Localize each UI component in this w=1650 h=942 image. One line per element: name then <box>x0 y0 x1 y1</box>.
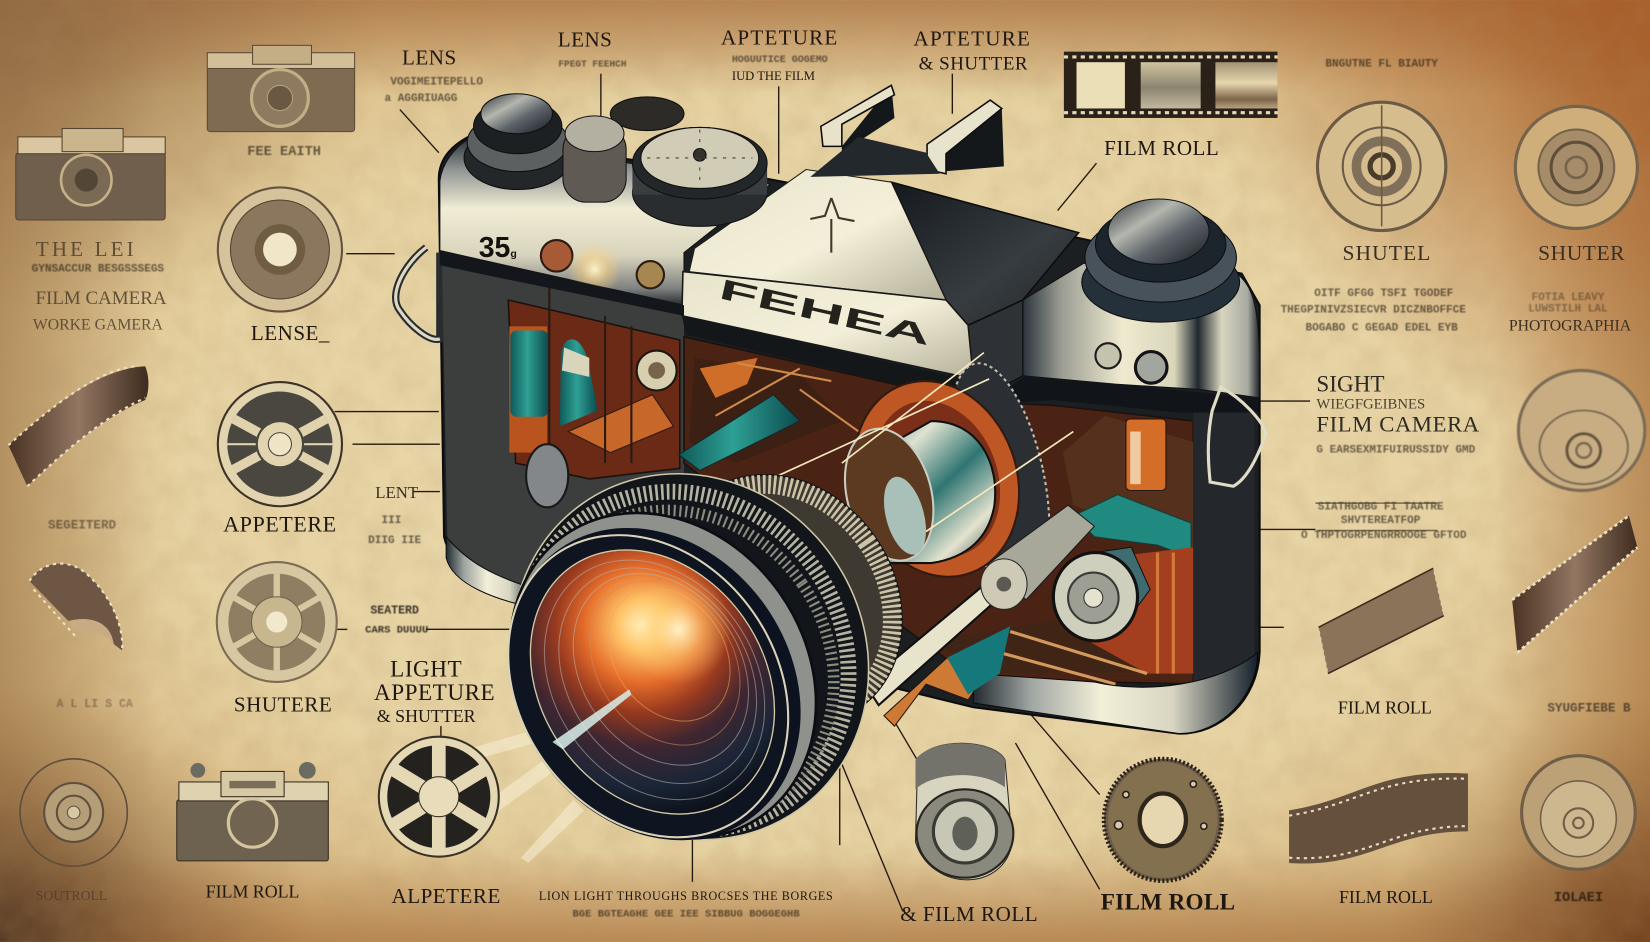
icon: film strip, top <box>1064 52 1277 118</box>
disc: shuter diagram <box>1515 106 1637 228</box>
heading: aperture: HOGUUTICE GOGEMO <box>732 54 828 65</box>
bottom caption: BGE BGTEAGHE GEE IEE SIBBUG BOGGEGHB <box>573 909 800 921</box>
small knob back <box>610 97 684 131</box>
centre knob <box>563 116 626 202</box>
lens: knurled rings <box>453 427 915 895</box>
black band under right plate <box>980 376 1259 413</box>
label: film roll, bold: FILM ROLL <box>1101 889 1235 915</box>
left leatherette <box>442 263 684 589</box>
text block: photographia: LUWSTILH LAL <box>1528 304 1608 316</box>
small camera: bottom <box>177 762 328 861</box>
beam lines in cutaway <box>737 353 1073 532</box>
icon: film strip, right centre <box>1319 568 1444 674</box>
heading: aperture and shutter: APTETURE <box>914 26 1031 50</box>
text: lent <box>368 483 421 547</box>
heading: lens, top left: VOGIMEITEPELLO <box>390 76 483 88</box>
sketch disc: right <box>1518 371 1645 490</box>
light beams <box>452 726 584 863</box>
garbled text block: under shutel: BOGABO C GEGAD EDEL EYB <box>1306 323 1458 335</box>
garbled caption: top right: BNGUTNE FL BIAUTY <box>1325 58 1438 70</box>
label: appetere: APPETERE <box>223 512 337 537</box>
disc: shutel diagram <box>1317 102 1446 231</box>
text block: sight / film camera: SIGHT <box>1316 372 1385 398</box>
front name plate <box>682 272 973 379</box>
black band under top plate <box>440 251 684 316</box>
label: film roll, bottom right: FILM ROLL <box>1339 887 1433 907</box>
label: and film roll: & FILM ROLL <box>900 902 1038 926</box>
text block: light aperture shutter: APPETURE <box>374 680 495 706</box>
heading: lens, top left: LENS <box>402 45 457 69</box>
lens: concentric rings <box>499 517 810 842</box>
inner lens ring <box>827 354 1067 603</box>
left cutaway interior <box>508 300 680 479</box>
garbled text block: right middle <box>1301 501 1467 542</box>
dark band below name plate <box>682 316 973 402</box>
rear lens barrel <box>618 429 950 771</box>
text block: the lens / film camera: FILM CAMERA <box>36 288 167 309</box>
disc: lens diagram <box>218 187 342 312</box>
sketch disc: bottom right <box>1522 756 1635 869</box>
text: lent: III <box>382 515 401 527</box>
garbled caption: left middle: SEGEITERD <box>48 517 117 532</box>
heading: lens, top: LENS <box>558 27 612 51</box>
text block: photographia <box>1509 292 1632 335</box>
small camera: top centre <box>207 45 355 132</box>
camera body: back plate <box>439 137 1260 734</box>
label: film roll, right: FILM ROLL <box>1338 698 1432 718</box>
rewind knob stack <box>464 94 571 190</box>
icon: curled film, left <box>29 564 122 650</box>
text block: the lens / film camera: THE LEI <box>36 237 137 261</box>
right plate buttons <box>1095 343 1167 383</box>
text block: sight / film camera: WIEGFGEIBNES <box>1316 396 1425 412</box>
centre cutaway interior <box>684 337 1193 684</box>
garbled text block: right middle: O THPTOGRPENGRROOGE GFTOD <box>1301 530 1467 542</box>
text block: sight / film camera <box>1316 372 1480 457</box>
right chrome base <box>973 653 1258 734</box>
garbled caption: under curled film: A L LI S CA <box>57 698 133 711</box>
garbled caption: bottom right: IOLAEI <box>1554 891 1603 906</box>
text block: light aperture shutter: LIGHT <box>390 657 462 683</box>
leader lines <box>335 74 1315 911</box>
icon: film strip, far right <box>1512 516 1637 653</box>
top plate studs <box>541 240 664 288</box>
illustration: main camera <box>396 85 1266 910</box>
text block: the lens / film camera <box>32 237 167 333</box>
text: lent: LENT <box>375 483 418 502</box>
shutter dial <box>632 127 767 226</box>
top plate flare <box>567 242 622 297</box>
brand name: FEHEA <box>716 274 934 352</box>
heading: aperture <box>721 25 839 83</box>
lens: chrome rim <box>451 481 846 892</box>
35mm mark: 35g <box>479 232 517 264</box>
left strap ring <box>396 247 440 339</box>
garbled text block: under shutel: THEGPINIVZSIECVR DICZNBOFFCE <box>1281 305 1466 317</box>
icon: film strip, left <box>8 366 148 486</box>
text block: light aperture shutter: & SHUTTER <box>377 706 476 726</box>
pentaprism: silver top face <box>689 170 946 300</box>
tube to lens <box>865 505 1150 726</box>
text block: photographia: PHOTOGRAPHIA <box>1509 318 1632 335</box>
text block: the lens / film camera: GYNSACCUR BESGSSSEGS <box>32 264 164 276</box>
garbled text block: under shutel <box>1281 288 1466 335</box>
icon: film strip, bottom right <box>1289 773 1468 863</box>
text block: sight / film camera: FILM CAMERA <box>1316 412 1480 437</box>
garbled text block: right middle: SIATHGOBG FI TAATRE <box>1318 501 1444 513</box>
text block: sight / film camera: G EARSEXMIFUIRUSSIDY GMD <box>1316 445 1476 457</box>
icon: black film reel <box>379 737 499 857</box>
inner chrome cylinder <box>831 419 995 571</box>
text block: light aperture shutter <box>374 657 495 726</box>
bottom caption: LION LIGHT THROUGHS BROCSES THE BORGES <box>539 889 833 903</box>
icon: film reel, left <box>218 382 342 506</box>
right rewind dial <box>1082 199 1240 322</box>
right leatherette <box>1193 405 1254 684</box>
heading: aperture and shutter: & SHUTTER <box>919 54 1028 75</box>
label: shutel: SHUTEL <box>1342 241 1431 265</box>
prism emblem <box>810 198 854 253</box>
bottom caption <box>539 889 833 921</box>
text: garbled shutter labels <box>365 605 428 637</box>
garbled caption: far right: SYUGFIEBE B <box>1547 700 1631 715</box>
lens: streak <box>552 689 631 749</box>
text block: the lens / film camera: WORKE GAMERA <box>33 316 164 333</box>
heading: lens, top left: a AGGRIUAGG <box>385 93 458 105</box>
disc: bottom left <box>20 759 127 866</box>
heading: lens, top left <box>385 45 483 105</box>
lens: grey inner band <box>447 453 879 898</box>
heading: aperture: APTETURE <box>721 25 839 49</box>
right strap ring <box>1208 387 1266 486</box>
disc: shutter reel <box>217 562 337 682</box>
icon: small lens barrel <box>915 743 1013 880</box>
text: lent: DIIG IIE <box>368 535 421 547</box>
text block: photographia: FOTIA LEAVY <box>1532 292 1605 304</box>
text: garbled shutter labels: SEATERD <box>370 605 419 618</box>
icon: metal gear disc <box>1104 759 1222 881</box>
label: lense: LENSE_ <box>251 321 330 345</box>
heading: aperture and shutter <box>914 26 1031 75</box>
centre interior parts <box>679 358 1193 684</box>
prism side dark <box>968 300 1023 402</box>
garbled text block: under shutel: OITF GFGG TSFI TGODEF <box>1314 288 1453 300</box>
label: shuter: SHUTER <box>1538 241 1625 265</box>
text: garbled shutter labels: CARS DUUUU <box>365 625 428 637</box>
heading: lens, top <box>558 27 627 69</box>
hot shoe <box>810 85 1004 177</box>
heading: lens, top: FPEGT FEEHCH <box>558 58 627 69</box>
right chrome plate <box>1023 263 1260 398</box>
lens: glare core <box>626 575 731 684</box>
left chrome top plate <box>440 139 770 305</box>
lens: outer mount <box>441 404 940 910</box>
heading: aperture: IUD THE FILM <box>732 69 815 83</box>
garbled text block: right middle: SHVTEREATFOP <box>1341 515 1421 527</box>
small camera: upper left <box>16 128 165 220</box>
pentaprism: dark right face <box>891 182 1079 325</box>
label: film roll, top: FILM ROLL <box>1104 136 1219 160</box>
label: shutere: SHUTERE <box>234 692 332 716</box>
lens: front glass <box>480 502 825 861</box>
label: film roll, bottom: FILM ROLL <box>206 882 299 902</box>
garbled caption: bottom left: SOUTROLL <box>36 888 107 903</box>
label: alpetere: ALPETERE <box>391 884 501 908</box>
lens: black mount <box>449 471 860 897</box>
bottom left chrome base <box>446 537 537 608</box>
caption: top centre camera: FEE EAITH <box>247 145 321 160</box>
left interior parts <box>509 284 677 507</box>
